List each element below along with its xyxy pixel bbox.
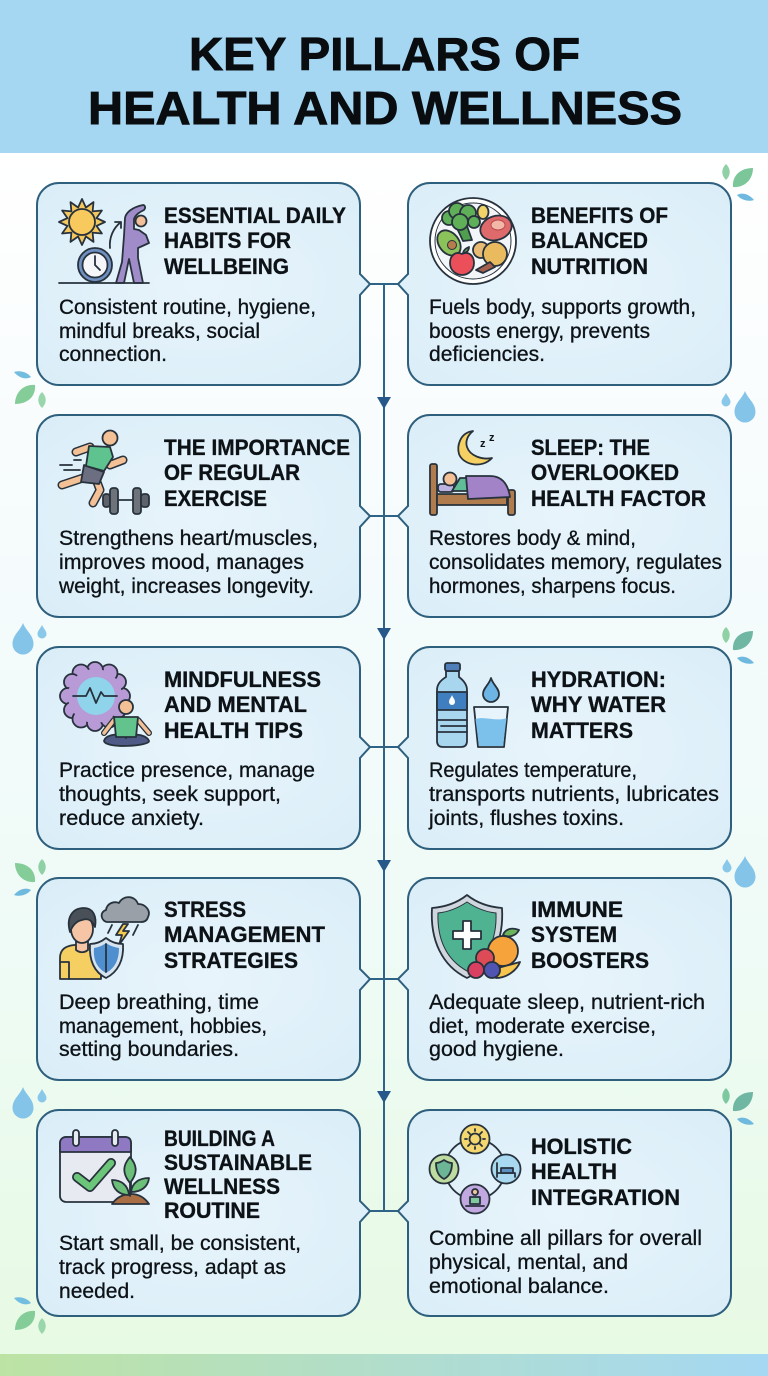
icon: moon and bed (430, 431, 515, 515)
body text: deficiencies. (429, 343, 545, 366)
heading: BUILDING A (164, 1126, 275, 1151)
body text (429, 1227, 702, 1298)
icon: holistic cycle (430, 1124, 520, 1214)
panel: sleep (398, 415, 731, 617)
heading: AND MENTAL (164, 692, 307, 717)
panel: mindfulness (37, 647, 370, 849)
body text: mindful breaks, social (59, 320, 260, 343)
body text: Deep breathing, time (59, 991, 259, 1014)
icon: plate of food (430, 198, 516, 284)
heading: WELLBEING (164, 254, 289, 279)
heading: NUTRITION (531, 254, 648, 279)
heading: OF REGULAR (164, 460, 300, 485)
body text: management, hobbies, (59, 1015, 267, 1038)
decoration: water drops left 2 (12, 1087, 46, 1118)
body text: Strengthens heart/muscles, (59, 527, 318, 550)
panel: essential daily habits (37, 183, 370, 385)
heading: HEALTH (531, 1159, 617, 1184)
body text: needed. (59, 1280, 135, 1303)
body text: physical, mental, and (429, 1251, 628, 1274)
heading (164, 897, 325, 973)
body text: Practice presence, manage (59, 759, 315, 782)
body text: consolidates memory, regulates (429, 551, 722, 574)
header banner (0, 0, 768, 153)
body text: Combine all pillars for overall (429, 1227, 702, 1250)
heading: MATTERS (531, 718, 633, 743)
body text: reduce anxiety. (59, 807, 204, 830)
body text: thoughts, seek support, (59, 783, 281, 806)
heading: EXERCISE (164, 486, 267, 511)
body text: Consistent routine, hygiene, (59, 296, 316, 319)
panel: regular exercise (37, 415, 370, 617)
body text: Fuels body, supports growth, (429, 296, 696, 319)
icon: runner and dumbbell (60, 430, 149, 514)
heading: BENEFITS OF (531, 203, 668, 228)
heading: HEALTH TIPS (164, 718, 303, 743)
body text: good hygiene. (429, 1038, 564, 1061)
heading: SUSTAINABLE (164, 1150, 312, 1175)
decoration: leaves left 1 (14, 371, 46, 408)
icon: water bottle and glass (437, 663, 508, 747)
body text: Regulates temperature, (429, 759, 637, 782)
panel: balanced nutrition (398, 183, 731, 385)
body text: joints, flushes toxins. (428, 807, 624, 830)
heading (531, 897, 649, 973)
heading (531, 435, 706, 511)
decoration: water drops right 2 (722, 856, 756, 888)
decoration: leaves right 3 (722, 1088, 754, 1125)
heading: BALANCED (531, 228, 648, 253)
heading: SYSTEM (531, 922, 617, 947)
body text (58, 527, 318, 598)
heading (531, 1134, 680, 1210)
heading: HABITS FOR (164, 228, 291, 253)
heading: MANAGEMENT (164, 922, 325, 947)
heading: HEALTH FACTOR (531, 486, 706, 511)
body text (428, 759, 719, 830)
decoration: leaves top right (722, 164, 754, 201)
decoration: leaves left 3 (14, 1297, 46, 1334)
connector timeline (370, 284, 398, 1211)
heading: OVERLOOKED (531, 460, 679, 485)
panel: sustainable routine (37, 1110, 370, 1316)
heading: SLEEP: THE (531, 435, 650, 460)
heading (164, 1126, 312, 1223)
title: HEALTH AND WELLNESS (88, 82, 682, 134)
icon: calendar and sprout (60, 1130, 149, 1204)
heading: MINDFULNESS (164, 667, 321, 692)
panel: stress management (37, 878, 370, 1080)
footer band (0, 1354, 768, 1376)
title: KEY PILLARS OF (189, 28, 580, 80)
icon: person, storm cloud and shield (60, 897, 149, 979)
heading: STRATEGIES (164, 948, 298, 973)
body text (59, 1232, 301, 1303)
heading: IMMUNE (531, 897, 623, 922)
heading: INTEGRATION (531, 1185, 680, 1210)
body text (429, 296, 696, 366)
heading: STRESS (164, 897, 246, 922)
decoration: water drops right 1 (722, 391, 756, 422)
heading (164, 435, 350, 511)
decoration: leaves left 2 (14, 859, 46, 896)
body text: Start small, be consistent, (59, 1232, 301, 1255)
heading (531, 667, 666, 743)
body text: Adequate sleep, nutrient-rich (429, 991, 705, 1014)
heading: ROUTINE (164, 1198, 260, 1223)
body text: track progress, adapt as (59, 1256, 286, 1279)
title (88, 28, 682, 134)
body text: connection. (59, 343, 167, 366)
body text (429, 991, 705, 1061)
body text (59, 759, 315, 830)
body text: boosts energy, prevents (429, 320, 650, 343)
icon: moon and bed: z (480, 438, 486, 450)
heading: BOOSTERS (531, 948, 649, 973)
body text: weight, increases longevity. (58, 575, 314, 598)
body text: transports nutrients, lubricates (429, 783, 719, 806)
heading: HOLISTIC (531, 1134, 632, 1159)
body text (59, 991, 267, 1061)
panel: holistic health (398, 1110, 731, 1316)
body text: Restores body & mind, (429, 527, 636, 550)
heading: WELLNESS (164, 1174, 280, 1199)
heading (531, 203, 668, 279)
heading: WHY WATER (531, 692, 666, 717)
body text: emotional balance. (429, 1275, 609, 1298)
body text: setting boundaries. (59, 1038, 239, 1061)
body text (429, 527, 722, 598)
panel: immune system (398, 878, 731, 1080)
body text: improves mood, manages (59, 551, 304, 574)
heading: THE IMPORTANCE (164, 435, 350, 460)
heading (164, 203, 346, 279)
heading: ESSENTIAL DAILY (164, 203, 346, 228)
icon: shield and fruit (432, 895, 520, 978)
body text: diet, moderate exercise, (429, 1015, 656, 1038)
decoration: water drops left 1 (12, 623, 46, 654)
heading: HYDRATION: (531, 667, 666, 692)
heading (164, 667, 321, 743)
icon: sun, clock and stretching person (59, 199, 149, 283)
body text: hormones, sharpens focus. (429, 575, 676, 598)
panel: hydration (398, 647, 731, 849)
icon: moon and bed: z (489, 432, 495, 444)
decoration: leaves right 2 (722, 627, 754, 664)
icon: brain and meditating person (60, 662, 149, 746)
body text (59, 296, 316, 366)
